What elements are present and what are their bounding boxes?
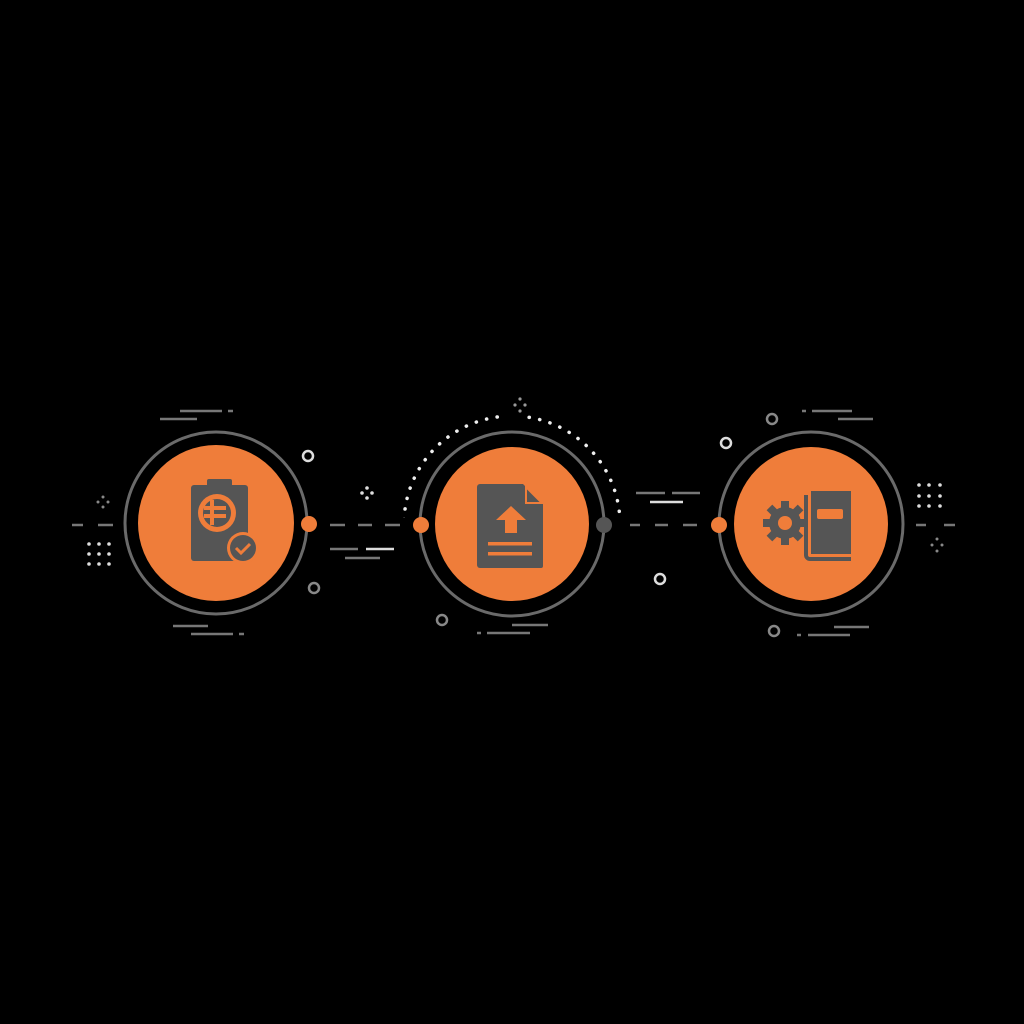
step 1: inspection [72, 411, 374, 634]
connector: step2 to step3 [626, 493, 700, 525]
step 2: upload document [400, 397, 665, 638]
decorations step1 [72, 411, 244, 634]
icon: gear and book [763, 491, 851, 559]
icon: clipboard with magnifier [191, 479, 259, 564]
icon: document upload [477, 484, 543, 568]
connector: step1 to step2 [330, 525, 400, 558]
step 3: manual settings [711, 411, 955, 636]
